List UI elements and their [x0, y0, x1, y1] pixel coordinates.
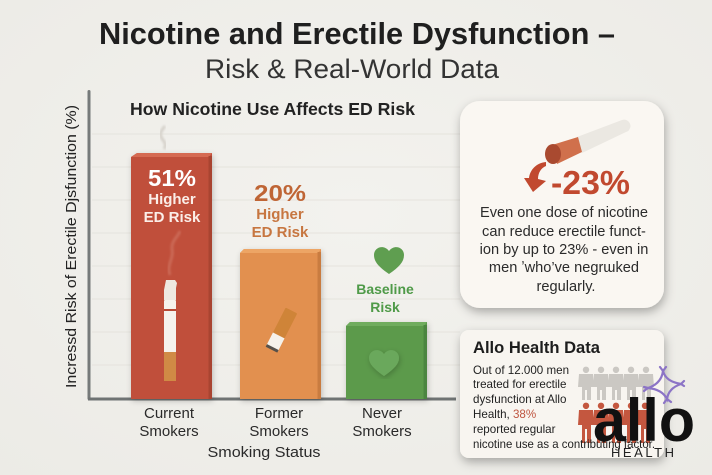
icon: down arrow: [524, 162, 546, 192]
category labels: Current: [144, 405, 195, 422]
body text: reported regular: [473, 423, 556, 436]
smoke: [169, 231, 180, 275]
logo wordmark: allo: [593, 387, 695, 454]
category labels: Smokers: [249, 423, 309, 440]
icon: cigarette butt: [266, 308, 297, 353]
body text: ion by up to 23% - even in: [480, 242, 648, 258]
body text: Out of 12.000 men: [473, 364, 569, 377]
baseline risk label: Baseline: [356, 281, 414, 297]
panel heading: Allo Health Data: [473, 339, 601, 357]
body text: Even one dose of nicotine: [480, 205, 648, 221]
category labels: Smokers: [139, 423, 199, 440]
category labels: Smokers: [352, 423, 412, 440]
x-axis label: Smoking Status: [208, 444, 320, 461]
title: Nicotine and Erectile Dysfunction –: [99, 16, 615, 51]
higher ED risk label: Higher: [148, 191, 196, 208]
bar: never smokers: [346, 322, 427, 399]
body text: Health, 38%: [473, 408, 536, 421]
subtitle: Risk & Real-World Data: [205, 54, 500, 84]
icon: heart on bar: [369, 350, 399, 376]
bar: former smokers: [240, 249, 321, 399]
logo mark: [644, 367, 684, 403]
former higher ED risk label: Higher: [256, 206, 304, 223]
panel: nicotine dose: [460, 101, 664, 308]
y-axis label: Incressd Risk of Erectile Djsfunction (%): [63, 105, 80, 388]
smoke wisp: [161, 126, 165, 149]
category labels: Former: [255, 405, 303, 422]
bar: current smokers: [131, 153, 212, 399]
baseline risk label: Risk: [370, 299, 400, 315]
icon: cigarette: [545, 120, 631, 164]
category labels: Never: [362, 405, 402, 422]
20% value: 20%: [254, 180, 306, 206]
higher ED risk label: ED Risk: [144, 209, 201, 226]
panel: allo health data: [460, 330, 664, 458]
icon: cigarette: [164, 280, 177, 381]
former higher ED risk label: ED Risk: [252, 224, 309, 241]
51% value: 51%: [148, 165, 196, 191]
body text: can reduce erectile funct-: [482, 224, 646, 240]
icon: heart above bar: [374, 247, 404, 274]
logo: allo health: [593, 367, 695, 460]
chart heading: How Nicotine Use Affects ED Risk: [130, 99, 415, 119]
x axis: [88, 398, 456, 400]
body text: dysfunction at Allo: [473, 393, 566, 406]
logo tagline: HEALTH: [611, 445, 674, 460]
body text: treated for erectile: [473, 378, 566, 391]
category labels: [139, 405, 412, 440]
y axis: [88, 90, 90, 400]
pictogram: people: [578, 367, 654, 443]
body text: regularly.: [537, 279, 595, 295]
body text: nicotine use as a contributing factor.: [473, 438, 655, 451]
body text: men ʼwho’ve negrɯked: [489, 260, 639, 276]
-23% value: -23%: [551, 164, 630, 201]
